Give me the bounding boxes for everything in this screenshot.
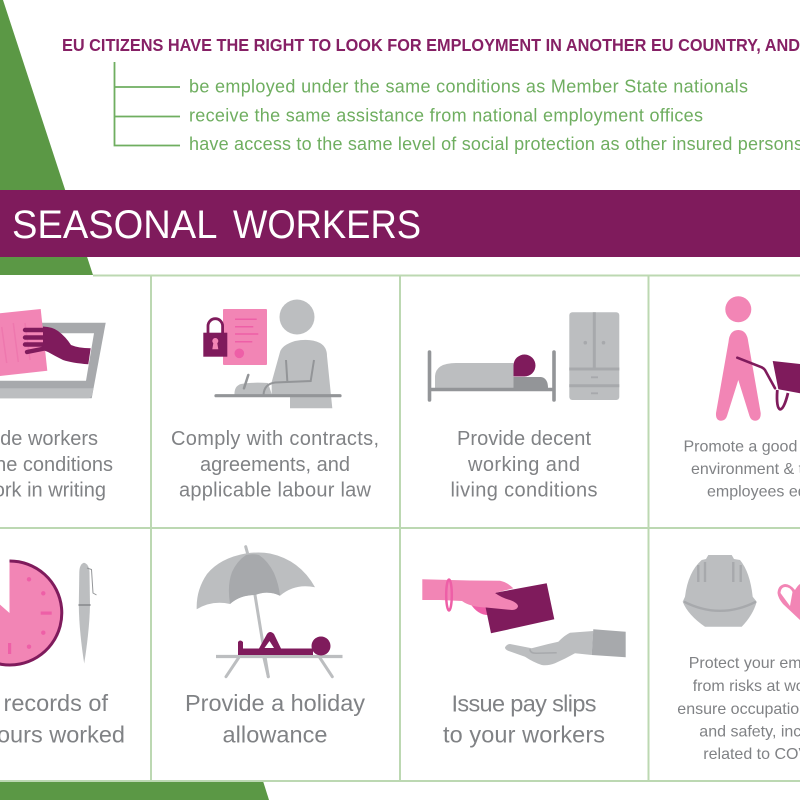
icon: hard hat ridges and brim <box>684 562 756 611</box>
title banner <box>0 190 800 257</box>
cell 1: written terms <box>0 309 113 502</box>
rights list <box>114 62 800 154</box>
icon: hands exchanging pay slip <box>422 579 626 665</box>
icon: person signing a locked contract <box>203 300 340 408</box>
caption <box>0 690 125 748</box>
right: same assistance: receive the same assistance from national employment offices <box>189 106 703 126</box>
green triangle top-left <box>0 0 93 275</box>
caption <box>450 428 598 502</box>
caption <box>171 428 379 502</box>
cell 6: holiday allowance <box>185 547 365 748</box>
caption <box>185 690 365 748</box>
cell 5: records of hours <box>0 561 125 748</box>
caption: Provide a holiday <box>185 690 365 716</box>
cell 3: living conditions <box>430 312 619 502</box>
caption <box>0 428 113 502</box>
cell 8: occupational safety <box>677 555 800 763</box>
icon: umbrella and sun lounger <box>197 547 342 677</box>
caption: applicable labour law <box>179 480 372 502</box>
caption: Comply with contracts, <box>171 428 379 450</box>
cell 2: contracts <box>171 300 379 502</box>
icon: clock and pen <box>0 561 96 665</box>
tree connector <box>114 62 180 146</box>
caption: Provide decent <box>457 428 591 450</box>
cell 7: pay slips <box>422 579 626 748</box>
icon: heart mask <box>778 584 800 620</box>
right: same conditions: be employed under the same conditions as Member State nationals <box>189 77 748 97</box>
icon: bed and wardrobe <box>430 312 619 400</box>
banner title: SEASONAL <box>12 203 216 247</box>
icon: hard hat <box>683 555 757 627</box>
caption: living conditions <box>450 480 598 502</box>
caption: Issue pay slips <box>452 691 596 717</box>
grid of responsibility cells <box>0 275 800 781</box>
caption <box>684 439 800 501</box>
icon: person pushing wheelbarrow <box>716 296 800 421</box>
caption: working and <box>467 454 580 476</box>
caption: allowance <box>222 722 328 748</box>
banner background <box>0 190 800 257</box>
right: same social protection: have access to the same level of social protection as other insured persons <box>189 134 800 154</box>
cell 4: good working environment <box>684 296 800 501</box>
caption: agreements, and <box>200 454 350 476</box>
banner title: WORKERS <box>233 203 421 247</box>
caption <box>677 655 800 763</box>
icon: laptop with document and hand <box>0 309 106 398</box>
green band bottom-left <box>0 781 269 800</box>
caption: to your workers <box>443 722 605 748</box>
caption <box>443 691 605 748</box>
